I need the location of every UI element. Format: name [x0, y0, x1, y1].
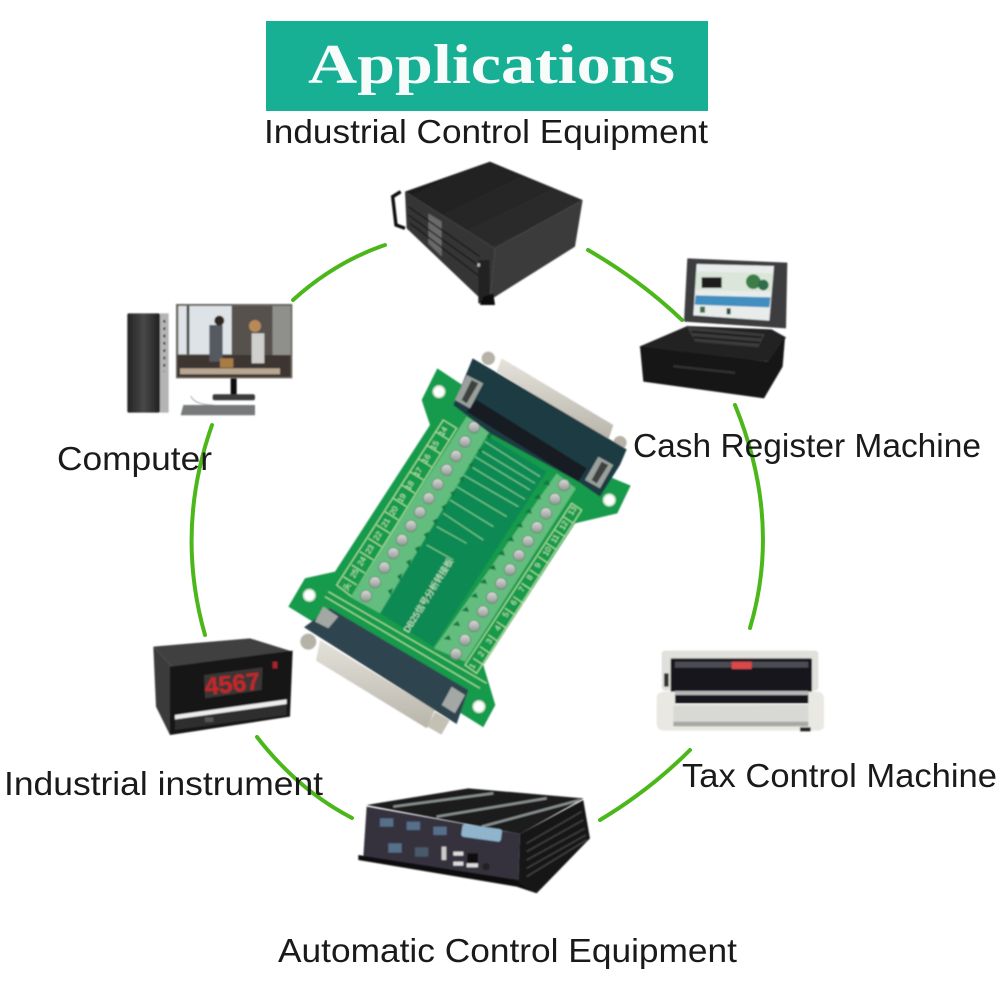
pin numbers 1 to 13: 12	[558, 519, 570, 531]
pin numbers 1 to 13: 2	[476, 649, 486, 658]
arc: instrument to computer	[192, 425, 212, 635]
pin numbers 14 to 25	[340, 425, 450, 592]
title banner	[266, 21, 708, 111]
pin numbers 14 to 25: 16	[420, 452, 433, 465]
device: panel instrument	[153, 638, 293, 735]
terminal screws	[360, 422, 570, 660]
pin numbers 14 to 25: 22	[372, 529, 384, 542]
pin numbers 14 to 25: 23	[364, 543, 376, 555]
label: cash register machine: Cash Register Machine	[633, 427, 981, 464]
display reading: 4567	[203, 668, 262, 703]
display	[204, 667, 263, 698]
pin numbers 1 to 13: 1	[467, 661, 478, 670]
arc: industrial control equipment to cash register	[588, 250, 682, 320]
central product: DB25 breakout board	[288, 352, 631, 735]
pin numbers 1 to 13: 4	[493, 623, 503, 632]
pin numbers 1 to 13	[467, 504, 579, 670]
bottom DB25 connector	[300, 607, 468, 735]
device: desktop computer	[127, 304, 292, 415]
label: computer: Computer	[57, 440, 212, 477]
pin numbers 14 to 25: 头	[340, 581, 353, 592]
pin numbers 1 to 13: 3	[484, 637, 494, 646]
pin numbers 1 to 13: 7	[517, 585, 527, 594]
computer tower	[127, 313, 169, 413]
pin numbers 14 to 25: 24	[356, 555, 368, 567]
arc: automatic control to instrument	[257, 737, 352, 818]
computer monitor	[176, 304, 292, 378]
device: fanless industrial PC	[358, 788, 590, 893]
pin numbers 14 to 25: 14	[437, 425, 450, 438]
pin numbers 1 to 13: 11	[549, 532, 561, 545]
pin numbers 14 to 25: 25	[348, 567, 361, 579]
pin numbers 14 to 25: 21	[380, 516, 392, 529]
pin numbers 1 to 13: 9	[533, 561, 543, 570]
device: rugged laptop cash register	[639, 258, 787, 398]
pin numbers 14 to 25: 19	[396, 491, 408, 504]
pin numbers 1 to 13: 8	[525, 573, 535, 582]
board silkscreen text: DB25信号分析转接板	[401, 556, 455, 634]
printer logo	[732, 662, 752, 669]
pin numbers 1 to 13: 5	[501, 610, 511, 619]
arc: tax control to automatic control	[600, 750, 690, 820]
terminal block teeth	[388, 433, 550, 640]
centre trace area	[380, 437, 547, 647]
left terminal block	[351, 417, 490, 613]
right terminal block	[434, 473, 576, 662]
label: industrial control equipment: Industrial Control Equipment	[264, 113, 708, 150]
pin numbers 14 to 25: 20	[388, 504, 400, 517]
pin numbers 14 to 25: 17	[412, 465, 425, 478]
pin numbers 14 to 25: 18	[404, 479, 416, 492]
pin label strips	[325, 420, 582, 688]
monitor stand and keyboard	[181, 378, 255, 415]
top DB25 connector	[453, 352, 627, 497]
label: industrial instrument: Industrial instrument	[4, 765, 323, 802]
pin numbers 1 to 13: 10	[541, 545, 554, 557]
ports	[380, 818, 502, 870]
device: rack server	[393, 162, 583, 305]
mounting holes	[304, 386, 615, 712]
arc: computer to industrial control equipment	[293, 245, 385, 300]
pin numbers 1 to 13: 6	[509, 598, 519, 607]
connecting ring: green arcs	[192, 245, 763, 820]
arc: cash register to tax control	[735, 405, 763, 628]
pin numbers 14 to 25: 15	[429, 439, 441, 452]
label: automatic control equipment: Automatic Control Equipment	[278, 932, 737, 969]
pin numbers 1 to 13: 13	[566, 504, 579, 517]
device: dot-matrix tax printer	[657, 651, 824, 731]
title text: Applications	[308, 34, 675, 96]
circuit board	[288, 368, 631, 727]
label: tax control machine: Tax Control Machine	[682, 757, 997, 794]
